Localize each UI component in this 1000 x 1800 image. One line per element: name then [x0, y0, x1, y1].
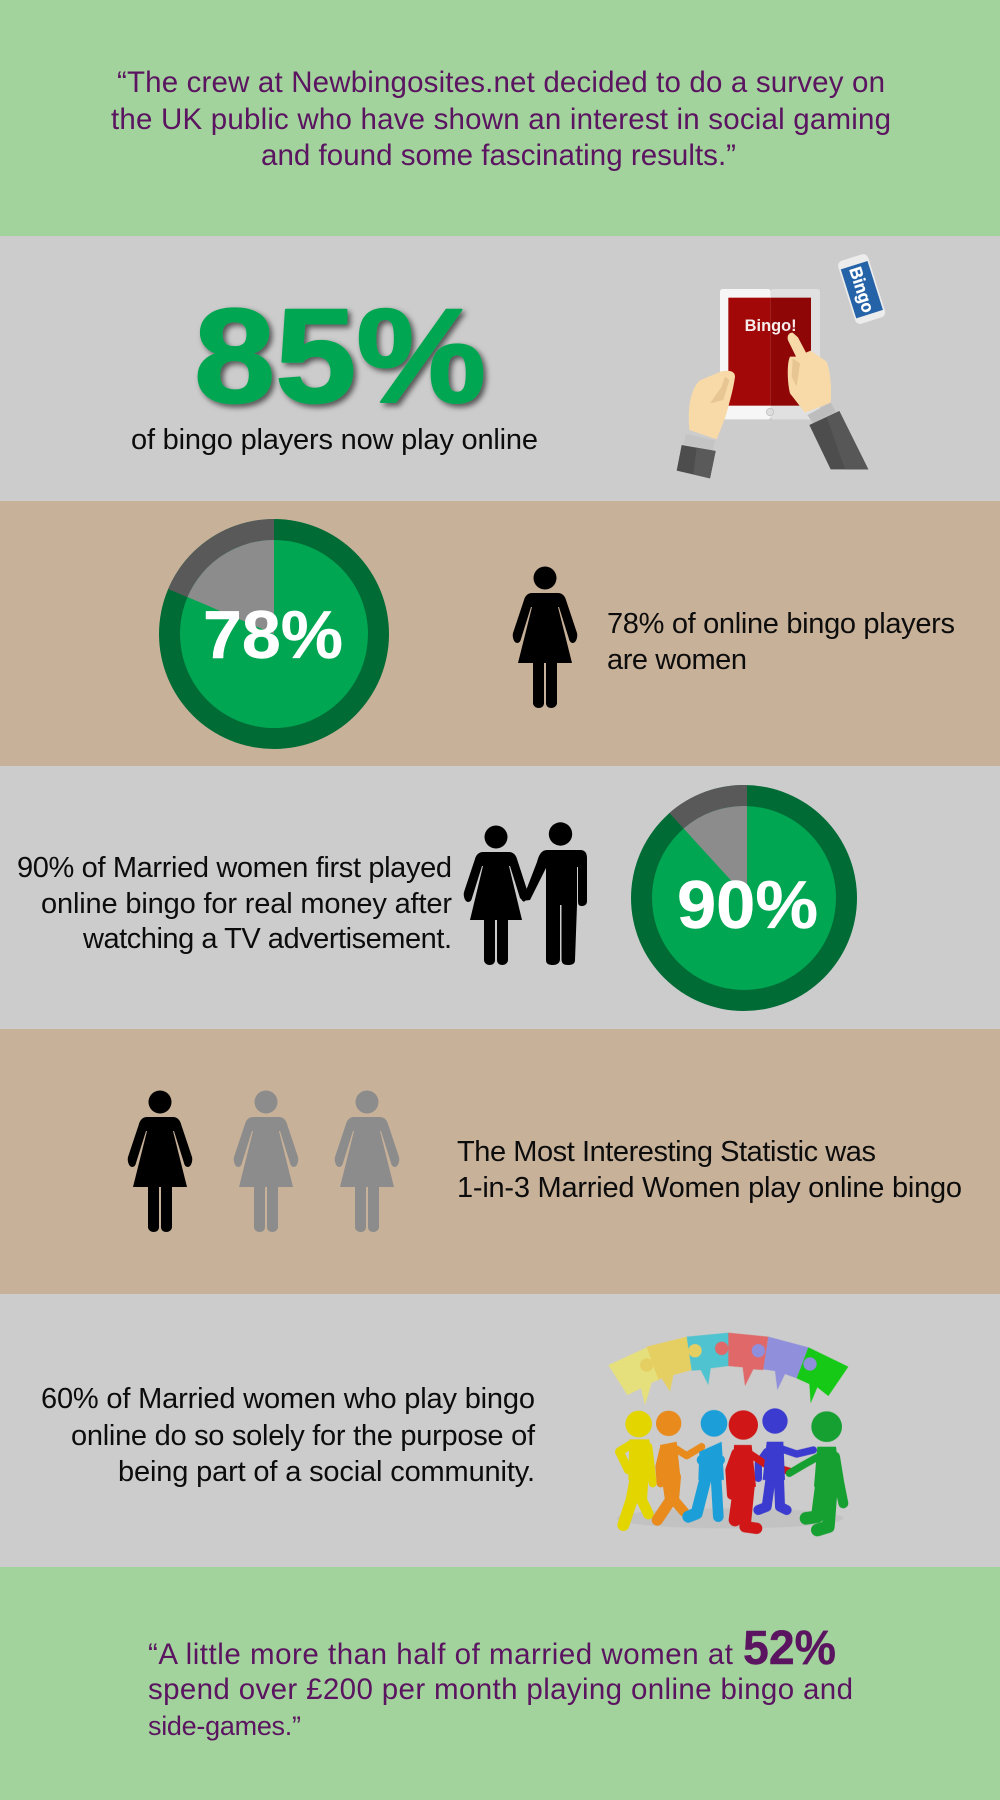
icon: hands holding tablet and phone: Bingo!	[745, 316, 797, 335]
text: 78% of online bingo players: are women	[607, 644, 747, 676]
panel: 85% play online	[0, 236, 1000, 501]
intro quote text: the UK public who have shown an interest in social gaming	[111, 103, 891, 136]
panel: closing quote	[0, 1567, 1000, 1800]
text: most interesting statistic: 1-in-3 Married Women play online bingo	[457, 1172, 962, 1204]
icon: couple holding hands	[464, 822, 587, 965]
text: 60% of married women	[41, 1383, 536, 1488]
big stat 85%: 85%	[194, 282, 486, 431]
text: 90% of married women: online bingo for real money after	[41, 888, 452, 920]
text: most interesting statistic: The Most Interesting Statistic was	[457, 1136, 876, 1168]
text: 90% of married women: 90% of Married women first played	[17, 852, 452, 884]
text: 60% of married women: online do so solely for the purpose of	[71, 1420, 536, 1452]
text: 78% of online bingo players: 78% of online bingo players	[607, 608, 955, 640]
text: most interesting statistic	[457, 1136, 962, 1204]
panel: 1-in-3 married women	[0, 1029, 1000, 1294]
icon: woman	[513, 566, 577, 708]
text: 60% of married women: being part of a social community.	[118, 1456, 535, 1488]
panel: 90% married women	[0, 766, 1000, 1029]
icon: hands holding tablet and phone: Bingo	[845, 264, 878, 315]
panel: intro quote	[0, 0, 1000, 236]
intro quote text: “The crew at Newbingosites.net decided to do a survey on	[117, 66, 885, 99]
icon: people under puzzle speech bubbles	[608, 1333, 848, 1530]
donut chart: 90%	[631, 785, 857, 1011]
closing quote text: side-games.”	[148, 1711, 301, 1741]
intro quote text: and found some fascinating results.”	[261, 139, 736, 172]
panel: 60% social community	[0, 1294, 1000, 1567]
highlighted stat 52%: 52%	[743, 1622, 836, 1675]
closing quote text: “A little more than half of married women at	[148, 1638, 733, 1671]
icon: hands holding tablet and phone	[677, 253, 887, 478]
icon: grey woman	[335, 1090, 399, 1232]
closing quote text: spend over £200 per month playing online bingo and	[148, 1673, 853, 1706]
donut chart: 90%: 90%	[677, 867, 818, 943]
text: 60% of married women: 60% of Married women who play bingo	[41, 1383, 535, 1415]
text: 90% of married women	[17, 852, 452, 955]
closing quote text	[148, 1638, 853, 1741]
text: 78% of online bingo players	[607, 608, 955, 676]
donut chart: 78%	[159, 519, 389, 749]
caption: of bingo players: of bingo players now play online	[131, 424, 538, 456]
panel: 78% women	[0, 501, 1000, 766]
intro quote text	[111, 66, 891, 172]
icon: grey woman	[234, 1090, 298, 1232]
text: 90% of married women: watching a TV advertisement.	[82, 923, 452, 955]
icon: black woman	[128, 1090, 192, 1232]
donut chart: 78%: 78%	[203, 597, 343, 673]
